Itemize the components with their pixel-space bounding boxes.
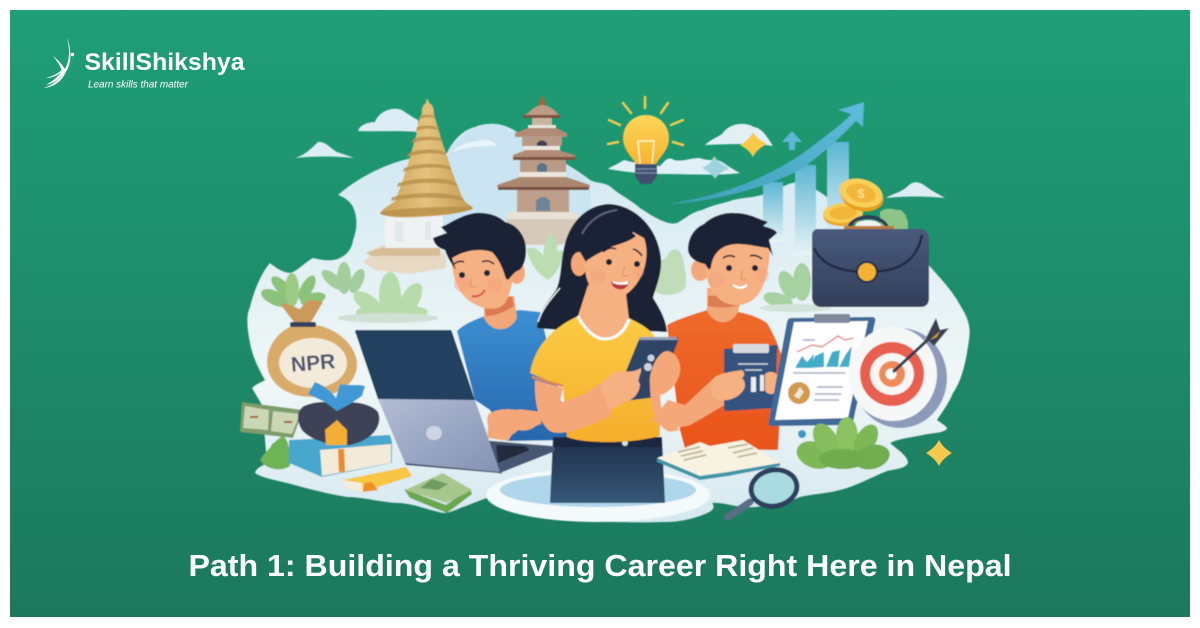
bulb glass	[623, 115, 669, 168]
lightbulb clouds	[608, 158, 740, 175]
faint plant between heads	[654, 249, 686, 295]
blue book	[289, 435, 392, 477]
clipboard clip	[814, 314, 850, 323]
small plant left	[260, 436, 290, 469]
large clipboard report	[768, 314, 875, 426]
green books	[404, 473, 472, 513]
neck	[707, 288, 745, 322]
logo: SkillShikshya	[44, 38, 245, 90]
small clipboard	[724, 345, 777, 411]
face	[705, 228, 770, 305]
collar	[578, 316, 629, 339]
white backdrop blob	[247, 124, 970, 522]
blue bow	[308, 382, 365, 411]
hand on clipboard	[712, 370, 745, 400]
blue shirt	[457, 310, 570, 441]
orange boy's arm and clipboard	[652, 344, 778, 427]
target with arrow	[849, 318, 949, 428]
left forearm	[535, 380, 615, 433]
bag tie	[290, 322, 316, 327]
sparkle gold	[740, 132, 767, 157]
stupa	[363, 99, 473, 274]
badge	[788, 382, 810, 404]
sparkle teal	[702, 157, 729, 179]
bag neck	[280, 300, 323, 322]
ear	[571, 252, 587, 276]
target rim	[853, 328, 947, 428]
background plants	[258, 209, 908, 323]
faint plant left of briefcase	[762, 263, 811, 311]
sky cloud	[452, 140, 497, 152]
face	[585, 232, 647, 300]
briefcase with coins	[812, 174, 929, 307]
money bag NPR	[267, 300, 357, 397]
long hair	[537, 204, 667, 332]
girl's arm with tablet	[535, 337, 680, 433]
mini area chart	[795, 346, 852, 368]
faint plant left of money bag	[318, 262, 368, 295]
coins: $	[857, 186, 865, 201]
boy in orange shirt	[667, 213, 783, 450]
sky tint patch	[400, 126, 592, 240]
briefcase clasp	[856, 261, 878, 283]
boy in blue shirt	[433, 213, 570, 441]
NPR label text: NPR	[290, 350, 336, 377]
small up arrow	[782, 131, 802, 150]
eyes, brows and smile	[723, 255, 762, 288]
dark pouch	[298, 402, 379, 445]
logo wordmark: SkillShikshya	[84, 49, 245, 76]
jeans	[550, 437, 665, 503]
green bush	[793, 417, 892, 474]
arrow shaft	[893, 334, 934, 372]
eyes, brows and smile	[454, 261, 494, 296]
plant behind briefcase	[880, 209, 908, 230]
hair	[433, 213, 526, 280]
laptop deck	[480, 440, 555, 473]
neck	[578, 285, 629, 339]
bulb rays	[608, 97, 683, 145]
red ring	[860, 342, 924, 406]
hand on laptop	[488, 410, 542, 441]
hand on tablet	[600, 368, 641, 410]
magnifying glass	[728, 466, 800, 517]
briefcase body	[812, 229, 929, 307]
faint plant centre	[349, 272, 428, 321]
growth chart	[668, 102, 864, 255]
laptop lower lid	[378, 399, 500, 472]
eyes, brows and smile	[603, 248, 642, 289]
faint plant behind pagoda	[527, 233, 563, 280]
laptop screen	[355, 330, 475, 400]
arrow fletching	[926, 318, 949, 346]
white pool under the girl	[486, 468, 710, 522]
stacked book and dark pouch	[289, 382, 392, 477]
gold gem	[325, 420, 347, 445]
stupa golden tiers	[380, 99, 473, 218]
banknotes	[240, 402, 303, 438]
tablet	[615, 337, 678, 402]
orange shirt	[667, 310, 783, 450]
face	[452, 224, 516, 309]
stupa steps	[363, 245, 446, 274]
blue dot	[798, 430, 806, 438]
ear	[691, 259, 709, 281]
pagoda roofs	[523, 105, 560, 116]
plant above money bag	[258, 273, 327, 311]
floating clouds	[295, 109, 945, 198]
girl in yellow shirt	[530, 204, 667, 503]
pagoda body	[517, 190, 569, 214]
pagoda	[497, 95, 590, 245]
briefcase handle	[848, 217, 888, 229]
icon: leaping figure	[44, 38, 74, 88]
big growth arrow	[668, 102, 864, 204]
bulb base	[635, 164, 657, 184]
cloud with sparkle	[705, 124, 773, 146]
fringe	[580, 228, 636, 262]
forearm	[652, 380, 738, 427]
yellow shirt	[530, 316, 660, 442]
stupa white base	[385, 214, 443, 248]
laptop	[355, 330, 555, 474]
logo tagline: Learn skills that matter	[88, 80, 189, 90]
neck	[484, 296, 517, 329]
open book	[657, 440, 780, 480]
illustration	[240, 95, 970, 522]
sparkle bottom right	[926, 440, 952, 466]
right arm	[650, 351, 680, 432]
sparkle pale gold	[708, 156, 728, 176]
blue shirt arm and hand	[487, 409, 540, 438]
lightbulb	[608, 97, 683, 184]
hair	[688, 213, 777, 269]
bag body	[267, 325, 357, 397]
bag label	[279, 338, 347, 388]
title: Path 1: Building a Thriving Career Right Here in Nepal	[188, 548, 1011, 583]
text lines	[814, 387, 843, 400]
yellow bar	[343, 467, 412, 492]
chart bars	[763, 182, 783, 242]
pagoda tip	[537, 95, 547, 107]
